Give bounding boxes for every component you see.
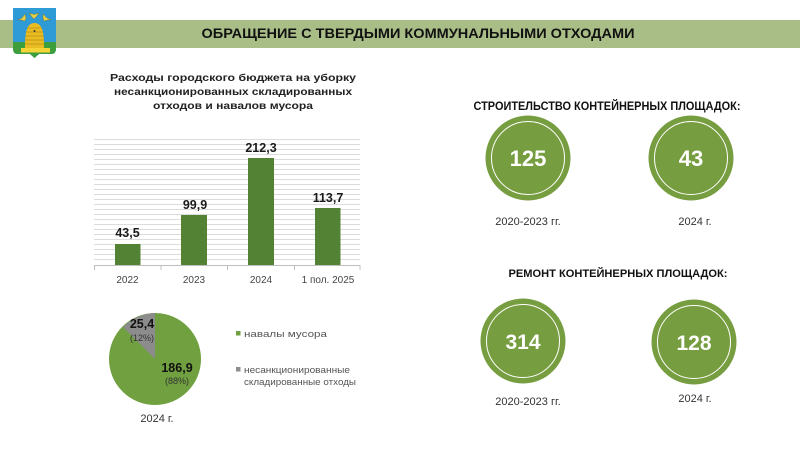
category labels: 2023 <box>183 275 206 286</box>
pie label: stored waste: 25,4 <box>130 317 154 331</box>
pie legend: складированные отходы <box>244 377 356 388</box>
stat: 314: 314 <box>505 331 541 354</box>
bar: 2024 <box>248 158 274 265</box>
stat caption: 2020-2023 гг. <box>495 216 561 228</box>
pie legend: навалы мусора <box>244 329 328 340</box>
chart title: отходов и навалов мусора <box>153 100 313 112</box>
heading: repair: РЕМОНТ КОНТЕЙНЕРНЫХ ПЛОЩАДОК: <box>508 267 728 280</box>
stat: 125 <box>486 116 570 200</box>
header banner <box>0 20 800 48</box>
pie year label: 2024 г. <box>140 413 174 425</box>
icon: coat of arms <box>13 8 56 58</box>
stat: 128: 128 <box>676 332 712 355</box>
bar values <box>115 141 343 240</box>
category labels <box>116 275 355 286</box>
bar: 2023 <box>181 215 207 265</box>
bar values: 99,9 <box>183 198 207 212</box>
stat: 43 <box>648 116 734 200</box>
bar values: 113,7 <box>313 191 343 205</box>
category labels: 2024 <box>250 275 273 286</box>
stat: 128 <box>652 300 736 384</box>
title: ОБРАЩЕНИЕ С ТВЕРДЫМИ КОММУНАЛЬНЫМИ ОТХОДАМИ <box>202 26 634 41</box>
pie legend <box>236 329 356 388</box>
stat caption: 2024 г. <box>678 216 712 228</box>
bar chart <box>94 140 360 286</box>
pie chart <box>109 313 201 405</box>
pie label: stored waste: (12%) <box>130 333 154 343</box>
heading: construction: СТРОИТЕЛЬСТВО КОНТЕЙНЕРНЫХ ПЛОЩАДОК: <box>474 100 740 113</box>
stat: 125: 125 <box>510 146 546 171</box>
category labels: 2022 <box>116 275 139 286</box>
bar values: 212,3 <box>245 141 277 155</box>
stat: 43: 43 <box>679 146 703 171</box>
stat caption: 2020-2023 гг. <box>495 396 561 408</box>
chart title <box>110 72 356 112</box>
pie label: waste dumps: 186,9 <box>161 361 193 375</box>
pie label: waste dumps <box>161 361 193 386</box>
pie legend: несанкционированные <box>244 365 350 376</box>
bar: 2022 <box>115 244 140 265</box>
chart title: Расходы городского бюджета на уборку <box>110 72 356 84</box>
category labels: 1 пол. 2025 <box>302 275 355 286</box>
chart title: несанкционированных складированных <box>114 86 352 98</box>
stat caption: 2024 г. <box>678 393 712 405</box>
bar: first half 2025 <box>315 208 340 265</box>
pie label: stored waste <box>130 317 154 343</box>
bar values: 43,5 <box>115 226 140 240</box>
stat: 314 <box>480 298 566 384</box>
pie label: waste dumps: (88%) <box>165 376 189 386</box>
